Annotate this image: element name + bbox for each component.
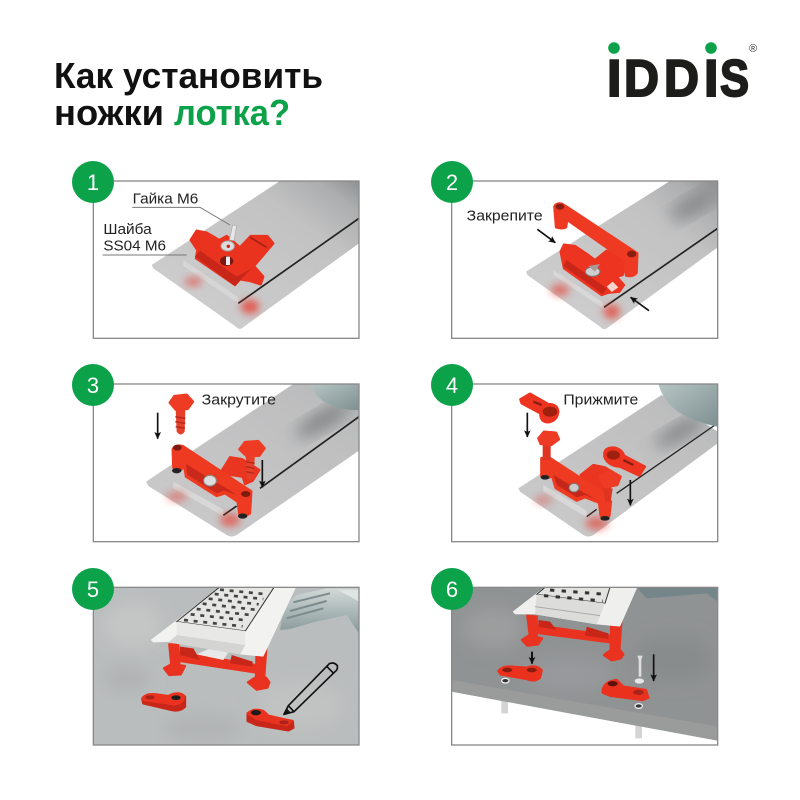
panel: step 4: [452, 384, 718, 542]
title: ножки: [54, 92, 164, 133]
arrow: [525, 413, 530, 437]
screw: [170, 395, 193, 434]
label: press: Прижмите: [563, 392, 638, 408]
leader lines: [103, 207, 230, 255]
badge 4: 4: [446, 373, 458, 398]
badge 3: 3: [87, 373, 99, 398]
icon: pencil: [284, 663, 337, 714]
red legs: [522, 616, 623, 660]
logo: IDDIS: I: [607, 50, 621, 108]
arrow: [155, 413, 160, 439]
label: washer: Шайба: [103, 222, 153, 238]
red bracket: [554, 203, 637, 276]
arrow: [628, 480, 633, 505]
sink: [658, 384, 718, 427]
badge 1: 1: [87, 170, 99, 195]
label: washer: SS04 М6: [103, 239, 166, 255]
label: screw in: Закрутите: [202, 392, 276, 408]
title: Как установить: [54, 55, 323, 96]
panel: step 3: [93, 384, 359, 542]
panel: step 1: [93, 181, 359, 338]
badge 5: 5: [87, 577, 99, 602]
sink: [638, 588, 717, 601]
arrow: [651, 654, 656, 681]
red foot piece: [248, 710, 293, 730]
badge 4: [431, 364, 473, 406]
panel: step 6: [452, 587, 718, 745]
label: nut: Гайка М6: [133, 191, 198, 207]
logo: IDDIS: I: [704, 50, 718, 108]
badge 5: [72, 568, 114, 610]
hex nut: [585, 264, 600, 276]
title: лотка?: [174, 92, 290, 133]
tray plate: [146, 384, 359, 537]
washers and anchor: [502, 656, 644, 708]
title: [54, 55, 323, 133]
arrow: [529, 652, 535, 664]
red bracket: [172, 445, 259, 519]
tray plate: [152, 181, 359, 329]
logo: IDDIS: ®: [749, 43, 757, 55]
sink: [311, 384, 359, 410]
tray with grate: [513, 587, 637, 627]
label: fix: Закрепите: [467, 209, 543, 225]
red clip: [191, 231, 273, 286]
pipe: [280, 588, 359, 633]
arrow: [631, 297, 649, 311]
badge 6: 6: [446, 577, 458, 602]
tray plate: [526, 181, 718, 329]
logo: IDDIS: [607, 42, 757, 108]
red foot piece: [520, 394, 558, 422]
badge 6: [431, 568, 473, 610]
badge 1: [72, 161, 114, 203]
panel: step 5: [93, 587, 359, 745]
badge 2: [431, 161, 473, 203]
arrow: [260, 460, 265, 487]
nut M6: [221, 225, 237, 251]
concrete floor: [93, 587, 359, 745]
logo: IDDIS: S: [720, 50, 749, 108]
label: washer: [103, 222, 166, 255]
tray with grate: [151, 587, 296, 657]
red clip: [561, 245, 626, 295]
badge 3: [72, 364, 114, 406]
panel: step 2: [452, 181, 720, 338]
logo: IDDIS: D: [624, 50, 659, 108]
screw: [239, 441, 265, 480]
red bracket with screws: [538, 432, 621, 521]
red foot piece: [498, 666, 542, 680]
red foot piece: [603, 680, 648, 700]
logo: IDDIS: D: [664, 50, 699, 108]
arrow: [537, 229, 555, 243]
badge 2: 2: [446, 170, 458, 195]
red foot piece: [604, 448, 645, 476]
red legs: [164, 644, 269, 690]
anchor bolts: [501, 697, 642, 738]
concrete slab: [452, 587, 718, 741]
tray plate: [518, 395, 718, 537]
red foot piece: [142, 693, 185, 710]
